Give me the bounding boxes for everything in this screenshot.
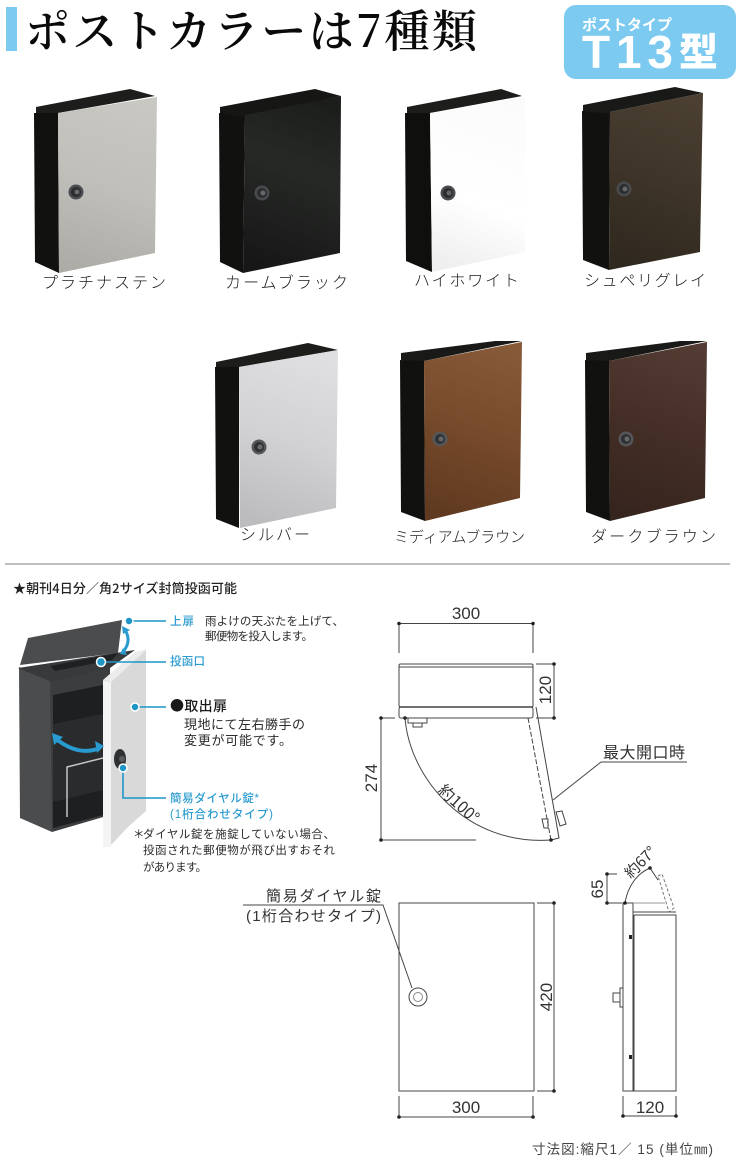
drawing: top view with open door: 120 [536,676,555,704]
badge: post type T13: T13 [582,26,673,78]
label: silver: シルバー [240,521,310,545]
callout leader lines [96,617,166,798]
footnote: dial lock caution: ＊ [133,826,144,842]
footnote: dial lock caution: があります。 [143,859,207,875]
caption: scale note: 寸法図:縮尺1／ 15 (単位㎜) [532,1142,713,1157]
label: calm black: カームブラック [225,269,348,293]
badge: post type T13: ポストタイプ [582,14,672,35]
swatch: calm black mailbox [219,89,341,273]
callout: removal door: 変更が可能です。 [184,730,292,749]
heading: capacity note: ★朝刊4日分／角2サイズ封筒投函可能 [13,578,237,597]
callout: removal door [170,696,305,749]
drawing: side view: 120 [636,1098,664,1117]
label: superior gray: シュペリグレイ [584,267,706,291]
callout: upper door [170,613,344,644]
drawing: side view [588,842,678,1118]
callout: mail slot: 投函口 [170,654,205,668]
footnote: dial lock caution: 投函された郵便物が飛び出すおそれ [143,842,336,858]
drawing: top view with open door: 274 [362,764,381,792]
drawing: front view: 300 [452,1098,480,1117]
callout: dial lock: (1桁合わせタイプ) [170,807,273,821]
title accent bar [6,7,17,51]
footnote: dial lock caution: ダイヤル錠を施錠していない場合、 [143,826,335,842]
callout: removal door: 現地にて左右勝手の [184,714,305,733]
arrow: door swing [52,733,104,753]
swatch: dark brown mailbox [585,341,707,521]
callout: upper door: 上扉 [170,615,194,628]
callout: dial lock: 簡易ダイヤル錠* [170,791,260,805]
label: platinum stainless: プラチナステン [42,269,166,293]
swatch: superior gray mailbox [582,87,703,270]
drawing: front view: 簡易ダイヤル錠 [266,887,381,905]
arrow: lid lift [120,626,130,655]
label: high white: ハイホワイト [414,267,519,291]
drawing: front view: 420 [537,983,556,1011]
drawing: top view with open door: 300 [452,604,480,623]
drawing: front view [243,887,556,1119]
callout: dial lock [170,791,273,821]
badge: post type T13: 型 [679,22,718,78]
drawing: top view with open door: 約100° [434,778,486,828]
swatch: platinum stainless mailbox [34,89,157,273]
drawing: top view with open door: 最大開口時 [603,744,685,762]
callout: upper door: 雨よけの天ぶたを上げて、 [205,613,344,629]
drawing: top view with open door [362,604,687,842]
swatch: silver mailbox [215,343,338,528]
badge: post type T13 [564,5,736,79]
drawing: front view: (1桁合わせタイプ) [246,908,381,925]
label: medium brown: ミディアムブラウン [394,526,525,547]
illustration: open mailbox [18,620,147,847]
drawing: side view: 65 [588,880,607,898]
drawing: side view: 約67° [620,842,661,883]
callout: removal door: ●取出扉 [170,696,227,716]
footnote: dial lock caution [133,826,336,875]
label: dark brown: ダークブラウン [591,523,716,547]
swatch: medium brown mailbox [400,341,522,521]
callout: upper door: 郵便物を投入します。 [205,628,313,644]
swatch: high white mailbox [405,89,525,272]
